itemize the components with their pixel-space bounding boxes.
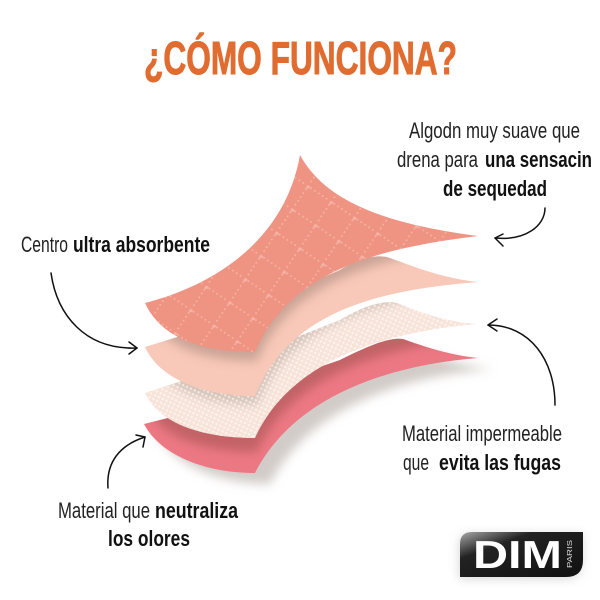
layer: soft cotton (145, 256, 478, 396)
title: ¿CÓMO FUNCIONA? (144, 32, 457, 84)
layered material diagram (144, 155, 493, 484)
arrow: absorbent core (51, 273, 137, 354)
layer: waterproof material (145, 302, 476, 438)
label: absorbent core: Centro (21, 232, 68, 257)
label: odor-neutralizing material: los olores (108, 526, 190, 551)
label: absorbent core (21, 232, 210, 257)
logo: DIM Paris: DIM (473, 534, 562, 577)
label: odor-neutralizing material: Material que (58, 498, 150, 523)
label: soft cotton: drena para (397, 147, 478, 172)
arrow: waterproof material (488, 319, 555, 405)
label: soft cotton: de sequedad (443, 176, 547, 201)
label: waterproof material: evita las fugas (439, 450, 561, 475)
logo: DIM Paris: PARIS (567, 540, 574, 568)
ground shadow (159, 350, 493, 484)
layer: ultra absorbent core (145, 155, 478, 352)
arrow: odor-neutralizing material (108, 435, 145, 488)
label: absorbent core: ultra absorbente (73, 232, 210, 257)
arrow: soft cotton (495, 208, 545, 246)
layer: odor-neutralizing material (144, 338, 478, 473)
label: waterproof material: que (403, 450, 429, 475)
label: soft cotton (397, 118, 592, 201)
label: odor-neutralizing material: neutraliza (155, 498, 238, 523)
label: waterproof material (402, 421, 562, 475)
logo: DIM Paris (459, 532, 583, 579)
label: odor-neutralizing material (58, 498, 238, 551)
